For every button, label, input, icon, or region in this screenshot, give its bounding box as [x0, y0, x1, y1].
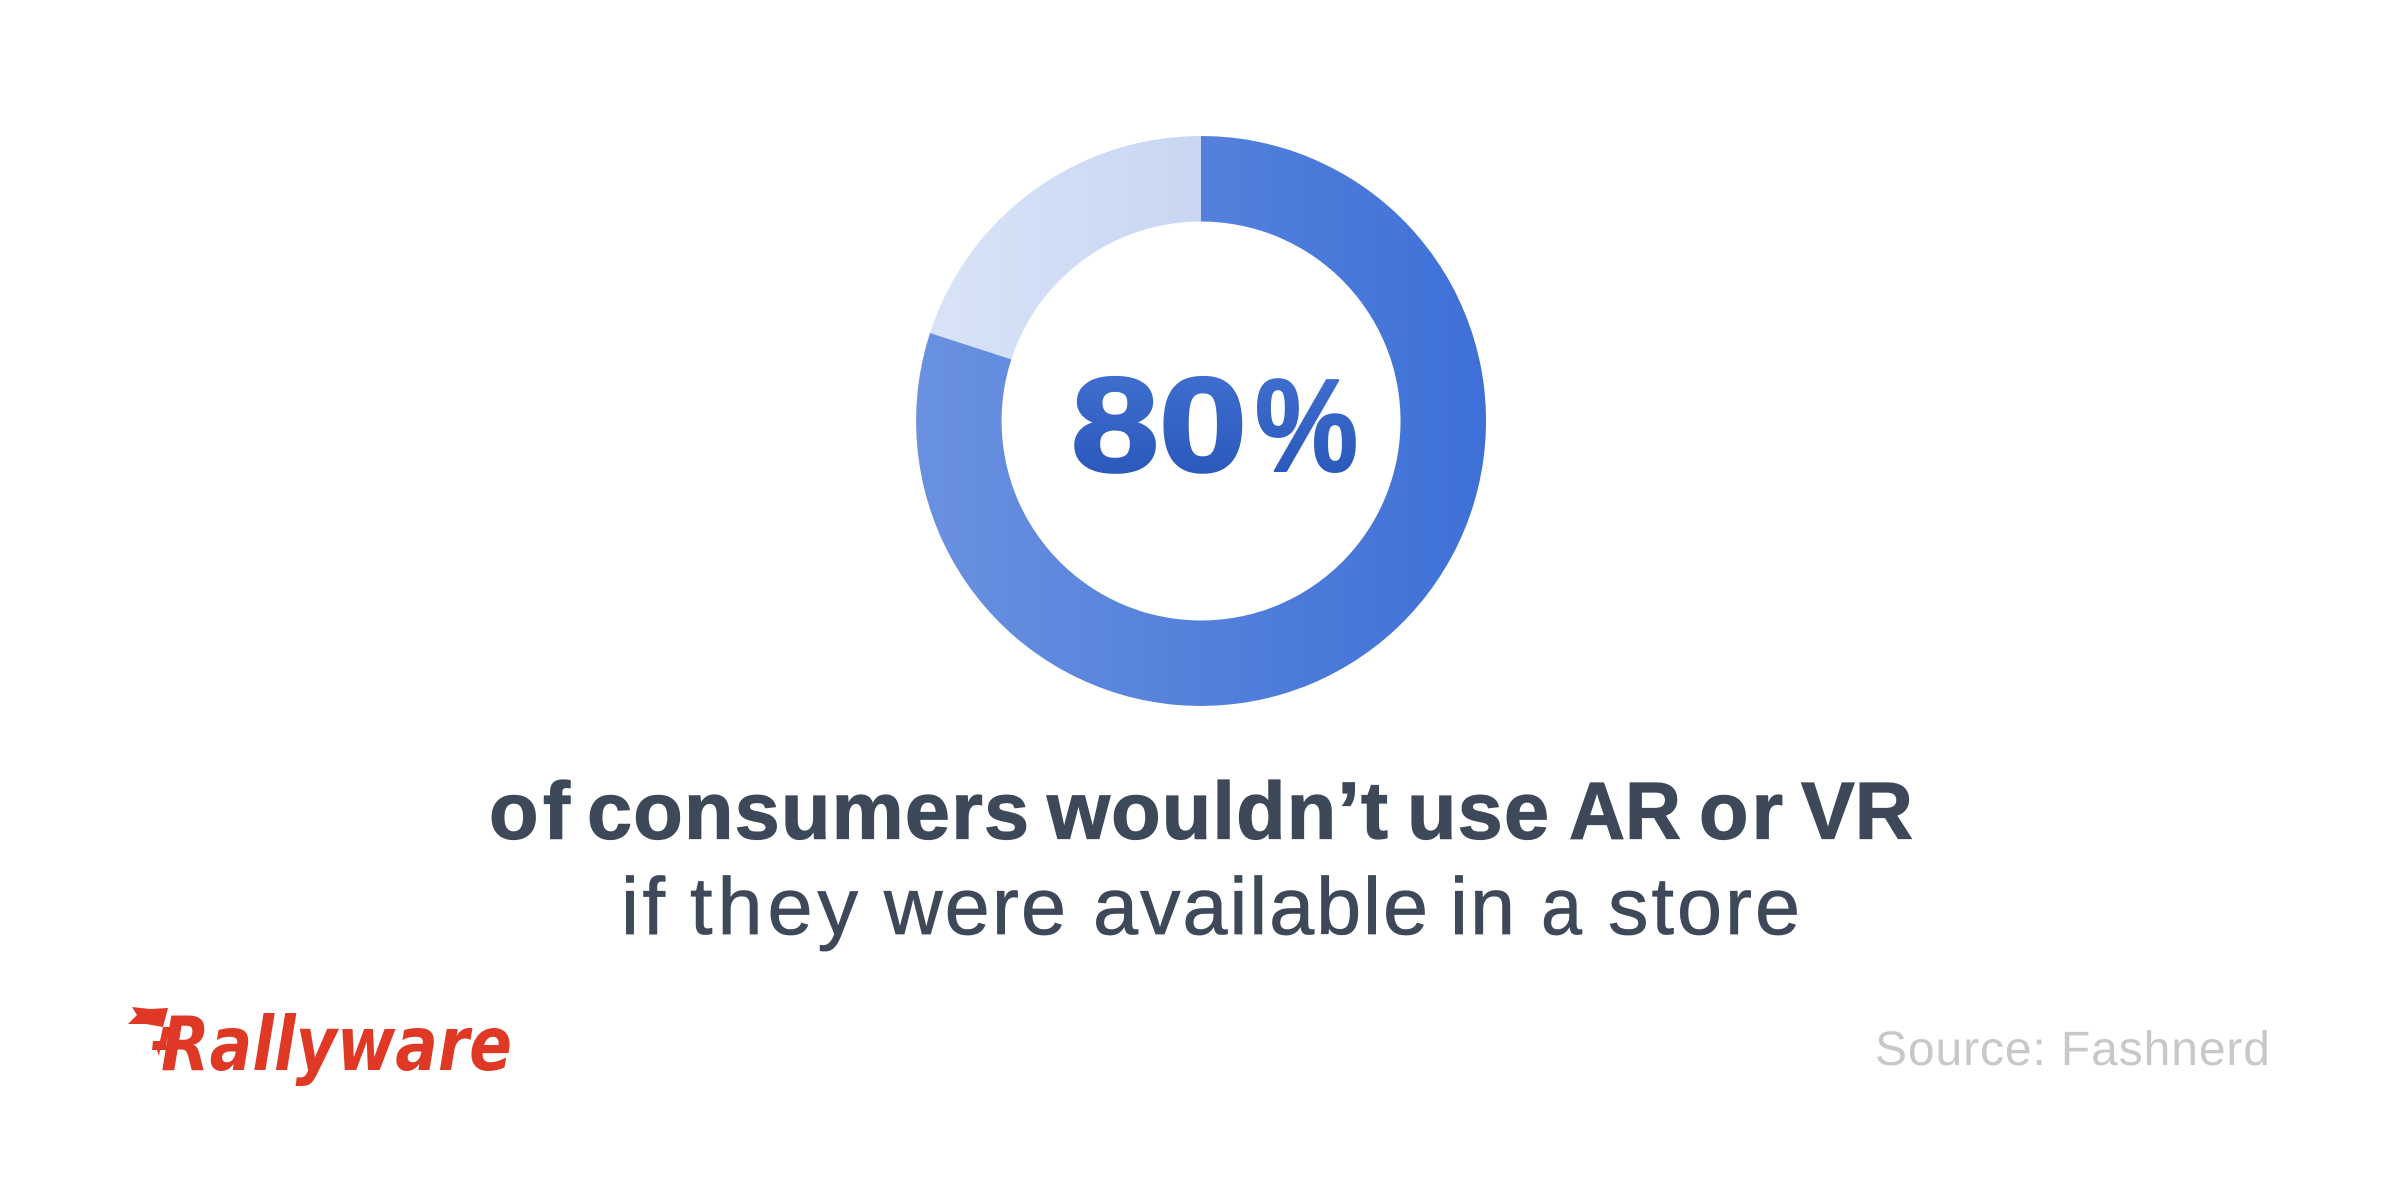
subheadline: regular line	[621, 862, 1800, 952]
logo wordmark: Rallyware	[161, 1000, 512, 1088]
headline: bold line	[489, 766, 1913, 856]
headline: bold line: use	[1407, 766, 1549, 856]
subheadline: regular line: were	[883, 862, 1066, 952]
subheadline: regular line: if	[621, 862, 665, 952]
big number: 80%	[1071, 351, 1358, 500]
big number: 80%: %	[1255, 352, 1358, 499]
subheadline: regular line: they	[690, 862, 858, 952]
headline: bold line: VR	[1801, 766, 1913, 856]
logo: Rallyware	[128, 1000, 512, 1088]
ring segment: remaining 20 percent	[930, 136, 1201, 359]
subheadline: regular line: available	[1093, 862, 1428, 952]
source note: Source: Fashnerd	[1875, 1023, 2270, 1076]
headline: bold line: AR	[1569, 766, 1681, 856]
icon: flag	[128, 1007, 177, 1056]
subheadline: regular line: store	[1608, 862, 1800, 952]
headline: bold line: wouldn’t	[1046, 766, 1388, 856]
ring segment: 80 percent	[916, 136, 1486, 706]
headline: bold line: consumers	[587, 766, 1029, 856]
headline: bold line: or	[1699, 766, 1783, 856]
subheadline: regular line: a	[1541, 862, 1583, 952]
headline: bold line: of	[489, 766, 571, 856]
subheadline: regular line: in	[1450, 862, 1515, 952]
donut chart: 80 percent	[916, 136, 1486, 706]
big number: 80%: 80	[1071, 351, 1247, 500]
